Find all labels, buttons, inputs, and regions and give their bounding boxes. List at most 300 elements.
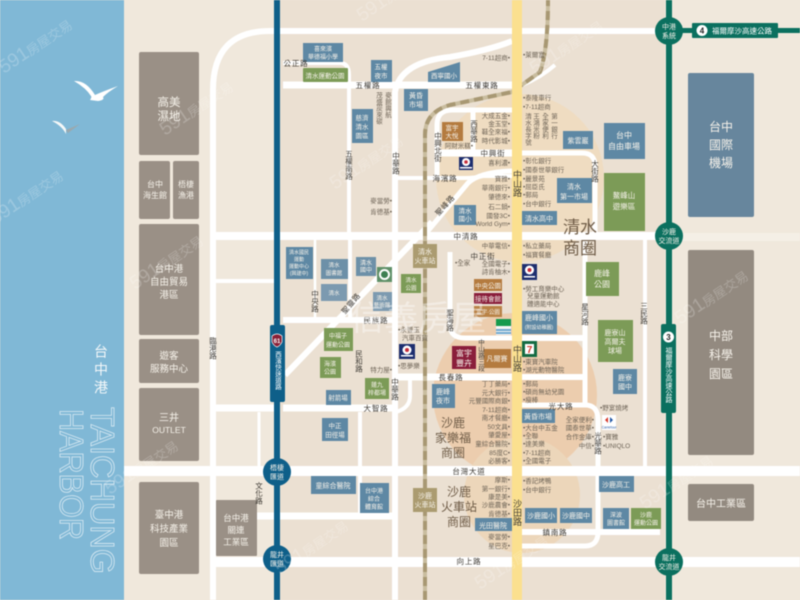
Reception Hall <box>474 293 502 304</box>
Lufeng Elementary: (附設幼稚園) <box>525 324 553 331</box>
Qingshui library <box>321 259 348 279</box>
Golf course <box>598 320 633 362</box>
Lianjiu sports field: 蓮九 <box>371 381 383 389</box>
road labels: 中興北街 <box>433 131 442 163</box>
poi labels left of main road: 沙鹿農會• <box>482 500 511 509</box>
poi labels right of main road: •萊爾富 <box>523 50 545 59</box>
Taichung Ocean Hall <box>139 161 170 219</box>
Qingshui High: 清水高中 <box>525 214 553 223</box>
seagull large <box>74 81 118 101</box>
road labels: 長春路 <box>439 372 463 382</box>
faint right road <box>672 233 800 241</box>
Zhongfu Park <box>324 328 353 351</box>
brand landmarks <box>377 122 617 430</box>
commercial zone: Shalu station <box>464 437 580 553</box>
Shenbo Library: 圖書館 <box>607 519 625 527</box>
Versailles <box>484 349 511 368</box>
Shalu Junior High: 沙鹿國中 <box>562 511 590 520</box>
Qingshui High <box>522 211 557 225</box>
poi labels left of main road: 南才餐廳• <box>482 413 511 422</box>
road labels: 三民路 <box>639 302 648 325</box>
Tungs Hospital <box>311 476 356 494</box>
Sports Complex: 體育館 <box>365 503 383 511</box>
poi labels left of main road: •思夢樂 <box>398 361 420 370</box>
Aofeng Mountain <box>604 173 645 231</box>
Gaomei Wetland <box>139 52 199 155</box>
Qingshui Station <box>413 244 437 268</box>
Shalu Carrefour business circle <box>435 415 471 460</box>
poi labels right of main road: •麗景苑 <box>523 174 545 183</box>
Lufeng Park: 鹿峰 <box>594 268 610 278</box>
road labels: 西華路 <box>469 120 478 143</box>
interchange Shalu <box>655 222 683 250</box>
poi labels left of main road: 肯德基• <box>488 509 511 518</box>
Wuquan night market: 夜市 <box>374 71 388 80</box>
Lufeng night market: 夜市 <box>436 396 450 405</box>
Qingshui Station: 火車站 <box>414 256 436 265</box>
freeway 4 sign <box>692 23 778 38</box>
Shenbo Library: 深波 <box>610 511 622 519</box>
road labels: 民和路 <box>354 350 364 373</box>
Shenbo Library <box>603 508 629 529</box>
poi labels left of main road: 麥當勞• <box>370 196 393 205</box>
Zhongzheng Stadium: 中正 <box>328 421 342 430</box>
poi labels left of main road: 茂盛炭來碳 <box>374 91 383 126</box>
harbor title <box>53 344 121 574</box>
road labels: 中央路 <box>310 289 320 313</box>
Sports Complex <box>360 483 389 513</box>
interchange Longjing: 龍井 <box>270 550 284 559</box>
road labels: 公正路 <box>284 58 308 68</box>
poi labels left of main road: 摩斯• <box>495 475 511 484</box>
poi labels left of main road: 7-11超商• <box>482 53 511 62</box>
road labels: 光大路 <box>549 401 573 411</box>
interchange Longjing east: 交流道 <box>658 562 680 571</box>
poi labels left of main road: 丁丁藥局• <box>482 379 511 388</box>
Shalu Carrefour business circle: 商圈 <box>441 445 465 460</box>
Tech Industrial Park: 科技產業 <box>150 523 188 535</box>
Qingshui centre block <box>321 284 347 301</box>
Versailles: 凡爾賽 <box>486 354 508 363</box>
Taichung Industrial Park: 台中工業區 <box>696 497 746 510</box>
Qingshui centre block: 清水 <box>328 289 340 297</box>
Fuyu Dayue <box>442 122 463 141</box>
poi labels right of main road: •香記烤鴨 <box>523 476 552 485</box>
poi labels right of main road: •福寶餐廳 <box>523 250 552 259</box>
evening market: 黃昏 <box>409 91 423 100</box>
poi labels left of main road: 汽車百貨 <box>402 333 428 342</box>
commercial zone: Shalu Carrefour <box>433 313 597 477</box>
poi labels left of main road: 阿財米糕• <box>445 141 474 150</box>
watermarks: 591房屋交易 <box>101 435 182 499</box>
poi labels right of main road: •彰化銀行 <box>523 156 552 165</box>
Fuyu Dayue: 富宇 <box>446 123 459 132</box>
poi labels right of main road: •7-11超商 <box>523 448 551 457</box>
interchange Shalu: 交流道 <box>658 236 680 245</box>
poi labels left of main road: •永豐玉 <box>398 325 420 334</box>
road labels: 中華路 <box>390 377 400 401</box>
Shalu Elementary <box>525 508 557 523</box>
Taichung Airport: 台中 <box>709 119 733 134</box>
badge 61 <box>270 325 285 402</box>
Shalu Junior High <box>560 508 592 523</box>
Qingshui Junior High <box>356 257 376 276</box>
Qingshui sports center: 運動中心 <box>289 263 309 270</box>
interchange Shalu: 沙鹿 <box>662 227 676 236</box>
road labels: 中正街 <box>471 251 495 261</box>
Wuqi Fishing Port: 梧棲 <box>178 179 194 189</box>
Shalu Station: 火車站 <box>414 500 436 509</box>
Gaomei Wetland: 濕地 <box>158 110 181 123</box>
poi labels left of main road: 85度C• <box>489 448 511 457</box>
Taichung Velodrome: 台中 <box>616 130 632 140</box>
interchange Zhonggang <box>655 17 683 45</box>
Aofeng Mountain: 鰲峰山 <box>613 190 635 200</box>
poi labels right of main road: •達美樂 <box>523 439 545 448</box>
poi labels right of main road: •碩尚無幼兒園 <box>523 387 564 396</box>
Fuyu Fenghui: 富宇 <box>456 348 472 358</box>
Qingshui business circle: 清水 <box>563 218 597 237</box>
Central Park: 中央公園 <box>475 281 501 290</box>
poi labels left of main road: 童綜合醫院• <box>475 439 511 448</box>
road labels: 大街路 <box>590 159 600 183</box>
Lufeng night market <box>432 384 455 408</box>
Qingshui Park <box>401 274 421 293</box>
road labels: 文化路 <box>254 481 264 505</box>
road labels: 台灣大道 <box>452 466 486 476</box>
road labels: 中山路 <box>512 344 522 373</box>
Tech Industrial Park <box>139 482 199 574</box>
watermarks: 591房屋交易 <box>156 76 237 140</box>
road labels: 五權東路 <box>465 80 499 90</box>
icon: FamilyMart <box>496 319 511 335</box>
road labels: 聖海路 <box>445 309 454 332</box>
road labels: 臨港路 <box>208 336 218 360</box>
Related Industrial Zone: 關連 <box>227 525 245 535</box>
Fuyu Dayue: 大悅 <box>446 131 459 140</box>
Tungs Hospital: 童綜合醫院 <box>316 481 350 490</box>
archery range: 射箭場 <box>328 393 348 402</box>
poi labels left of main road: 星巴克• <box>488 542 511 550</box>
Xining Elementary: 西寧國小 <box>431 71 458 80</box>
watermarks: 591房屋交易 <box>526 15 607 79</box>
interchange Longjing east: 龍井 <box>662 553 676 562</box>
poi labels left of main road: 肇愛屋• <box>488 430 511 439</box>
poi labels right of main road: •UNIQLO <box>603 443 630 450</box>
poi labels right of main road: •郵局 <box>523 379 538 388</box>
poi labels right of main road: 中信• <box>579 441 595 450</box>
Qingshui Junior High: 清水 <box>360 259 372 267</box>
school: 華德福小學 <box>308 53 338 61</box>
Related Industrial Zone: 工業區 <box>223 537 249 547</box>
Taichung Velodrome <box>604 123 645 159</box>
First Market: 第一市場 <box>560 192 588 201</box>
poi labels right of main road: 合作金庫• <box>566 432 595 441</box>
sea panel <box>0 0 124 600</box>
Free Trade Port Zone: 台中港 <box>155 263 184 275</box>
poi labels left of main road: 華南銀行• <box>482 183 511 192</box>
school: 喜來濱 <box>314 45 332 53</box>
Central Science Park: 中部 <box>709 328 733 343</box>
road labels: 民族路 <box>364 315 388 325</box>
Zhongfu Park: 中福子 <box>329 332 347 340</box>
expressway 61 <box>274 0 280 600</box>
Shalu Station: 沙鹿 <box>418 491 432 500</box>
poi labels left of main road: 大成五金• <box>482 111 511 120</box>
poi labels right of main road: •台中銀行 <box>523 485 552 494</box>
commercial zone: Qingshui <box>436 94 604 262</box>
Sports Complex: 台中港 <box>365 487 383 495</box>
Qingshui library: 清水 <box>328 261 340 269</box>
road labels: 光華路 <box>593 431 602 455</box>
poi labels left of main road: •全家 <box>455 258 471 267</box>
interchange Longjing: 匯道 <box>270 559 284 568</box>
poi labels left of main road: 鞋全來福• <box>482 127 511 136</box>
Free Trade Port Zone: 自由貿易 <box>150 276 188 288</box>
poi labels left of main road <box>370 53 511 550</box>
Tzu Chi Qingshui <box>352 109 373 143</box>
poi labels right of main road: •瘦棒 <box>523 395 539 404</box>
poi labels right of main road: 全家便利• <box>566 415 595 424</box>
Mitsui Outlet: OUTLET <box>152 425 186 435</box>
Visitor Center: 服務中心 <box>150 363 188 375</box>
poi labels left of main road: 石二鍋• <box>488 202 511 211</box>
icon: 7-Eleven: 7 <box>527 345 533 356</box>
poi labels right of main road: •台中銀行 <box>523 199 552 208</box>
Mitsui Outlet <box>139 388 199 461</box>
road labels: 中山路三段 <box>476 338 485 373</box>
Shalu Sports Park: 運動公園 <box>634 519 658 527</box>
Qingshui hall <box>373 292 392 311</box>
road labels: 中山路 <box>512 169 522 198</box>
Reception Hall: 接待會館 <box>475 294 502 303</box>
Shalu Station business circle: 商圈 <box>447 514 471 529</box>
Qingshui hall: 清水 <box>376 294 388 302</box>
Qingshui Sports Park <box>303 68 348 82</box>
watermarks: 591房屋交易 <box>671 265 752 329</box>
freeway 4 sign: 4 <box>700 26 705 36</box>
evening market <box>404 89 428 111</box>
poi labels right of main road: •郵局 <box>523 190 538 199</box>
poi labels right of main road: 清水長字號 <box>524 112 532 147</box>
interchange Wuqi <box>263 458 291 486</box>
Golf course: 球場 <box>608 346 622 355</box>
road labels: 中清路 <box>454 231 478 241</box>
seaside park: 公園 <box>324 369 336 376</box>
Lufeng Park <box>586 262 619 296</box>
blue facilities <box>286 43 645 531</box>
Qingshui Elementary <box>454 205 476 225</box>
school <box>303 43 343 62</box>
Sports Complex: 綜合 <box>368 495 380 503</box>
orange marker: 富宇·公園 <box>476 308 500 316</box>
poi labels right of main road: •野宴燒烤 <box>600 403 629 412</box>
interchange Longjing <box>263 545 291 573</box>
poi labels right of main road: •湖光動物醫院 <box>523 365 565 374</box>
poi labels right of main road: •勞工育樂中心 <box>523 284 565 293</box>
poi labels right of main road: 體適能中心 <box>527 299 560 308</box>
Qingshui Elementary: 國小 <box>458 214 472 223</box>
Shalu Station business circle: 火車站 <box>441 500 477 514</box>
Lianjiu sports field <box>365 378 389 399</box>
poi labels left of main road: 時代影城• <box>482 136 511 145</box>
watermarks: 591房屋交易 <box>636 450 717 514</box>
icon: PX Mart 1 <box>459 157 473 170</box>
icon: Carrefour <box>602 415 617 430</box>
poi labels left of main road: 中華電信• <box>482 241 511 250</box>
Lufeng Junior High: 鹿寮 <box>618 373 632 382</box>
Lianjiu sports field: 梓都場 <box>368 389 386 397</box>
badge 61: 61 <box>274 339 281 345</box>
Central Science Park <box>688 250 754 455</box>
expressway badges <box>263 17 778 576</box>
Taichung Ocean Hall: 台中 <box>147 179 163 189</box>
Zhongfu Park: 運動公園 <box>326 341 350 349</box>
poi labels left of main road: 元豐國際商銀• <box>469 396 511 405</box>
Golf course: 鹿寮山 <box>604 328 626 337</box>
Mitsui Outlet: 三井 <box>159 411 179 424</box>
Qingshui Park: 清水 <box>405 276 417 284</box>
national freeway 4 <box>668 28 800 33</box>
poi labels right of main road: 國泰世華• <box>566 423 595 432</box>
poi labels right of main road: •國泰世華銀行 <box>523 165 565 174</box>
Fuyu Fenghui <box>452 346 476 369</box>
freeway 3 sign <box>661 324 676 413</box>
Shalu Sports Park <box>631 508 661 529</box>
Taichung Harbor English line 1: TAICHUNG <box>84 407 121 574</box>
Qingshui sports center: (興建中) <box>290 270 308 277</box>
seagulls <box>52 81 118 134</box>
Qingshui hall: 藝術館 <box>374 301 391 309</box>
green parks <box>303 68 661 529</box>
poi labels left of main road: 國發3C• <box>486 211 511 220</box>
central land tint <box>280 0 665 600</box>
poi labels left of main road: 第一銀行• <box>482 484 511 493</box>
Shalu Sports Park: 沙鹿 <box>640 511 652 519</box>
Kuang Tien Hospital <box>475 518 512 531</box>
poi labels left of main road: 詩肯柚木• <box>482 267 511 276</box>
road labels: 五權路 <box>356 80 380 90</box>
Tech Industrial Park: 臺中港 <box>155 509 184 521</box>
road labels: 向上路 <box>457 556 481 566</box>
Central Park <box>474 279 502 291</box>
icon: PX Mart 3 <box>399 344 415 359</box>
road labels: 鎮南路 <box>543 527 567 537</box>
national freeway 3 <box>666 0 672 600</box>
blocks: left industrial and harbour <box>139 52 257 574</box>
poi labels left of main road: World Gym• <box>475 221 511 228</box>
Lufeng Elementary <box>522 311 557 334</box>
Golf course: 高爾夫 <box>604 337 626 346</box>
evening market 2 <box>522 409 555 423</box>
poi labels right of main road: •屈臣氏 <box>523 182 545 191</box>
district names <box>435 218 597 529</box>
Fuyu Fenghui: 豐卉 <box>456 358 472 368</box>
Shalu Station business circle <box>441 484 477 529</box>
poi labels left of main road: 肇德來• <box>488 192 511 201</box>
interchange Zhonggang: 系統 <box>662 31 676 40</box>
Lufeng Elementary: 鹿峰國小 <box>525 313 553 322</box>
railway <box>425 0 548 600</box>
poi labels left of main road: 元大銀行• <box>482 388 511 397</box>
Shalu Station <box>413 488 437 512</box>
watermarks: 591房屋交易 <box>471 530 552 594</box>
icon: 7-Eleven <box>522 341 537 357</box>
railway stations <box>413 244 437 512</box>
watermarks: 591房屋交易 <box>126 230 207 294</box>
archery range <box>326 390 351 405</box>
Central Science Park: 科學 <box>709 348 733 362</box>
blocks: right large zones <box>688 73 754 521</box>
icon: Carrefour: Carrefour <box>602 426 617 430</box>
Qingshui sports center: 運動 <box>294 256 304 263</box>
First Market <box>557 178 592 203</box>
road labels <box>208 58 648 566</box>
Free Trade Port Zone <box>139 224 199 335</box>
freeway 4 sign: 福爾摩沙高速公路 <box>712 26 772 36</box>
Taichung Velodrome: 自由車場 <box>608 141 640 151</box>
interchange Longjing east <box>655 548 683 576</box>
Central Science Park: 園區 <box>709 367 733 381</box>
poi labels right of main road: •泰隆車行 <box>523 93 552 102</box>
poi labels right of main road: 王鴻米粉 <box>532 113 540 140</box>
Xining Elementary <box>428 62 460 82</box>
poi labels right of main road: •東寶汽車院 <box>523 357 558 366</box>
evening market: 市場 <box>409 100 423 109</box>
poi labels left of main road: 7-11超商• <box>482 405 511 414</box>
Kuang Tien Hospital: 光田醫院 <box>479 521 507 530</box>
freeway 3 sign: 3 <box>666 333 671 342</box>
poi labels left of main road: 寶雅• <box>495 174 511 183</box>
poi labels right of main road: •全聯 <box>523 431 539 440</box>
Zhongzheng Stadium: 田徑場 <box>325 430 345 439</box>
freeway 3 sign: 福爾摩沙高速公路 <box>665 346 672 404</box>
Taichung Industrial Park <box>688 484 754 521</box>
Shalu Vocational: 沙鹿高工 <box>602 480 630 489</box>
poi labels right of main road: •大台中五金 <box>523 423 558 432</box>
watermarks: 591房屋交易 <box>326 130 407 194</box>
poi labels left of main road: 康是美• <box>488 492 511 501</box>
Lufeng Junior High: 國中 <box>618 382 632 391</box>
Qingshui library: 圖書館 <box>326 269 343 277</box>
Gaomei Wetland: 高美 <box>158 95 180 109</box>
poi labels right of main road <box>523 50 630 494</box>
icon: PX Mart 2 <box>522 264 537 280</box>
poi labels right of main road: •7-11超商 <box>523 102 551 111</box>
Shalu Vocational <box>599 476 634 492</box>
Tech Industrial Park: 園區 <box>159 538 179 549</box>
Shalu Station business circle: 沙鹿 <box>447 484 471 499</box>
Wuquan night market: 五權 <box>374 62 388 71</box>
Shalu Elementary: 沙鹿國小 <box>527 511 555 520</box>
Free Trade Port Zone: 港區 <box>159 289 179 301</box>
Ziyun Temple: 紫雲巖 <box>568 136 588 145</box>
interchange Wuqi: 匯道 <box>270 472 284 481</box>
icon: Starbucks <box>377 267 392 282</box>
orange marker <box>474 306 502 317</box>
evening market 2: 黃昏市場 <box>524 412 552 421</box>
road labels: 聖峰路 <box>433 192 457 218</box>
Lufeng Park: 公園 <box>594 280 610 289</box>
Zhongzheng Stadium <box>322 418 348 441</box>
poi labels left of main road: 全國電子• <box>482 260 511 268</box>
Qingshui Elementary: 清水 <box>458 206 472 215</box>
poi labels left of main road: 麥館興航 <box>384 91 392 119</box>
Tzu Chi Qingshui: 園區 <box>356 132 369 140</box>
poi labels left of main road: 喜利濃• <box>488 158 511 167</box>
poi labels left of main road: 50文具• <box>487 422 511 431</box>
Taichung Airport: 國際 <box>709 138 733 152</box>
